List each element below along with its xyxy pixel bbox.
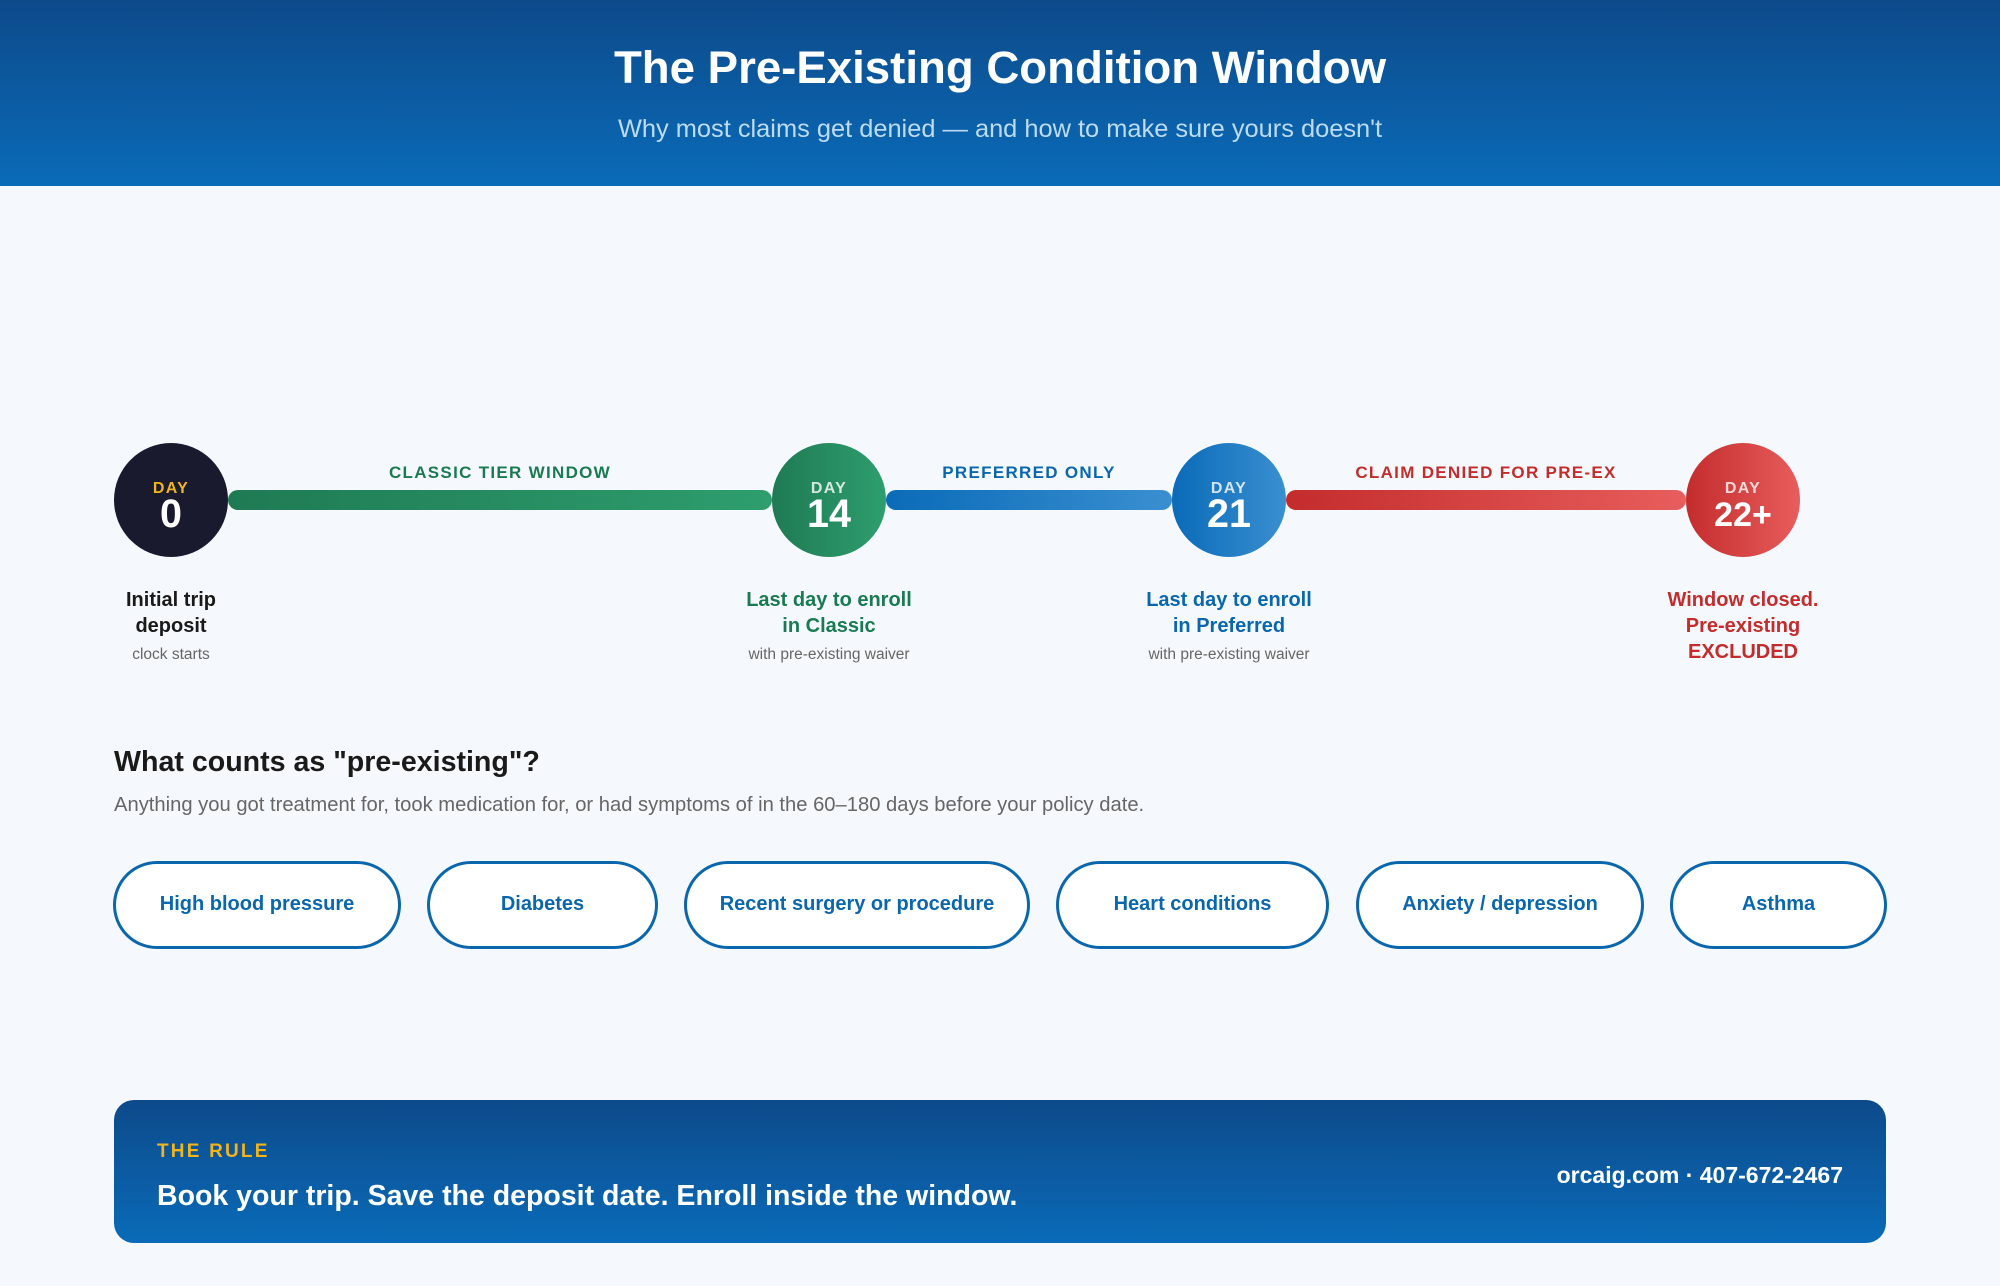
pill: anxiety: [1356, 861, 1644, 949]
milestone: day 14: [772, 443, 886, 557]
contact: orcaig.com · 407-672-2467: [1557, 1162, 1843, 1188]
label: day 22+: Window closed.: [1668, 589, 1818, 611]
pill: diabetes: [427, 861, 658, 949]
timeline: [114, 443, 1818, 663]
pill: high blood pressure: High blood pressure: [160, 893, 354, 915]
pill: recent surgery: Recent surgery or procedure: [720, 893, 994, 915]
bar label: classic: CLASSIC TIER WINDOW: [389, 463, 611, 482]
bar: classic tier window: [228, 490, 772, 510]
label: day 14: in Classic: [782, 615, 876, 637]
pill: asthma: Asthma: [1742, 893, 1815, 915]
rule eyebrow: THE RULE: [157, 1140, 270, 1162]
label: day 22+: Pre-existing: [1686, 615, 1800, 637]
pill: heart conditions: [1056, 861, 1329, 949]
milestone: day 0: 0: [160, 492, 182, 536]
label: day 0: clock starts: [132, 646, 210, 663]
bar: preferred only: [886, 490, 1172, 510]
milestone: day 21: DAY: [1211, 480, 1247, 496]
bar label: denied: CLAIM DENIED FOR PRE-EX: [1355, 463, 1617, 482]
section description: Anything you got treatment for, took medication for, or had symptoms of in the 60–180 days before your policy date.: [114, 794, 1144, 816]
bar: claim denied: [1286, 490, 1686, 510]
pill: asthma: [1670, 861, 1887, 949]
header banner: [0, 0, 2000, 186]
label: day 0: Initial trip: [126, 589, 216, 611]
pill: heart conditions: Heart conditions: [1114, 893, 1271, 915]
label: day 22+: [1668, 589, 1818, 663]
subtitle: Why most claims get denied — and how to make sure yours doesn't: [618, 114, 1382, 142]
milestone: day 14: DAY: [811, 480, 847, 496]
milestone: day 22+: DAY: [1725, 480, 1761, 496]
label: day 21: with pre-existing waiver: [1148, 646, 1310, 663]
bar label: preferred: PREFERRED ONLY: [942, 463, 1116, 482]
milestone: day 22+: 22+: [1714, 496, 1772, 534]
footer rule banner: [114, 1100, 1886, 1243]
rule statement: Book your trip. Save the deposit date. Enroll inside the window.: [157, 1180, 1017, 1212]
pill: recent surgery: [684, 861, 1030, 949]
milestone: day 21: 21: [1207, 492, 1251, 536]
title: The Pre-Existing Condition Window: [614, 42, 1386, 93]
label: day 14: with pre-existing waiver: [748, 646, 910, 663]
label: day 21: [1146, 589, 1312, 663]
milestone: day 21: [1172, 443, 1286, 557]
pill: high blood pressure: [113, 861, 401, 949]
pill: anxiety: Anxiety / depression: [1402, 893, 1598, 915]
label: day 0: [126, 589, 216, 663]
pill: diabetes: Diabetes: [501, 893, 584, 915]
milestone: day 0: [114, 443, 228, 557]
milestone: day 0: DAY: [153, 480, 189, 496]
label: day 14: [746, 589, 912, 663]
milestone: day 14: 14: [807, 492, 851, 536]
label: day 0: deposit: [135, 615, 207, 637]
label: day 21: Last day to enroll: [1146, 589, 1312, 611]
section heading: What counts as "pre-existing"?: [114, 746, 540, 778]
label: day 22+: EXCLUDED: [1688, 641, 1798, 663]
label: day 14: Last day to enroll: [746, 589, 912, 611]
label: day 21: in Preferred: [1173, 615, 1285, 637]
milestone: day 22+: [1686, 443, 1800, 557]
